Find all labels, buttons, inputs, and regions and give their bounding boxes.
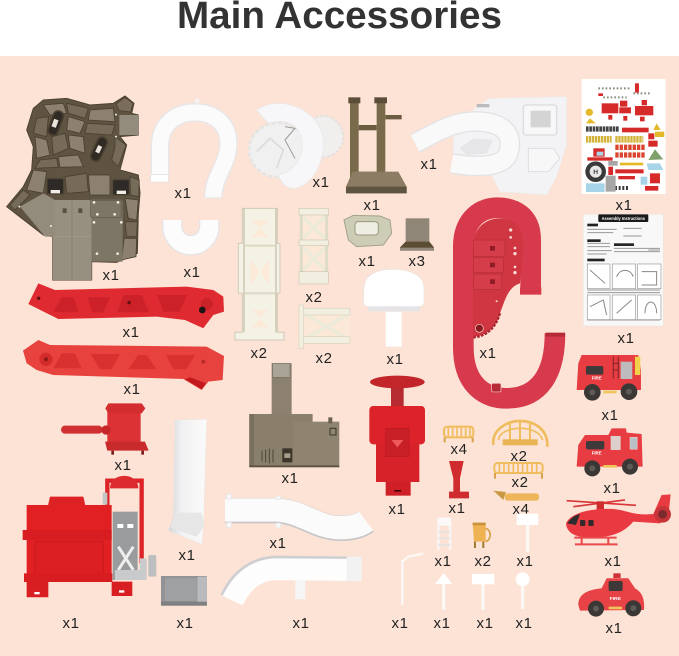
item: grey base block [400,218,434,270]
item: white curved track lower [232,557,362,632]
item: white radar dome: x1 [386,351,404,368]
item: rock base: x1 [102,267,120,284]
item: white lamp post: x1 [391,615,409,632]
item: horizontal lattice: x2 [315,350,333,367]
item: white curved track upper: x1 [269,535,287,552]
item: yellow bar: x4 [512,501,530,518]
sticker scene [587,83,660,191]
item: fire truck two [577,428,643,497]
item: yellow long barrier: x2 [511,474,529,491]
item: small rock: x1 [358,253,376,270]
item: brown machine block: x1 [281,470,299,487]
item: round sign: x1 [515,615,533,632]
item: white rectangular sign upper: x1 [516,553,534,570]
item: red bridge bar upper [28,283,224,341]
item: fire truck one: x1 [601,407,619,424]
item: fire truck two: FIRE [592,450,602,455]
item: large white swirl slide [415,97,567,195]
item: yellow barrier small: x4 [450,441,468,458]
item: red pole tower [369,376,425,518]
item: grey tray [161,576,207,632]
item: triangle sign: x1 [433,615,451,632]
item: red helicopter: x1 [604,553,622,570]
item: white radar dome [363,269,424,368]
item: fire truck two: x1 [603,480,621,497]
item: white lamp post [391,554,423,632]
item: small rock [344,215,392,270]
item: horizontal lattice [299,305,350,367]
item: short lattice tower: x2 [305,289,323,306]
item: red fire car [578,573,644,637]
item: triangle sign [433,573,452,632]
item: white swirl track: x1 [312,174,330,191]
item: red fire car: x1 [605,620,623,637]
item: brown machine block [249,363,339,487]
item: red crank machine [61,403,149,474]
item: tall lattice tower: x2 [250,345,268,362]
item: red fire car: FIRE [610,596,622,602]
item: small U track [172,220,209,281]
item: small red post [448,461,469,517]
item: brown stand [346,97,407,214]
item: white ladder [434,518,452,570]
item: white chute: x1 [178,547,196,564]
item: fire truck one: FIRE [592,375,602,380]
item: red fire station [23,476,156,632]
item: sticker sheet: x1 [615,197,633,214]
item: small U track: x1 [183,264,201,281]
item: brown stand: x1 [363,197,381,214]
item: yellow bar [493,491,539,518]
item: assembly instructions sheet [583,214,663,347]
item: white curved track lower: x1 [292,615,310,632]
item: rectangular sign [472,574,494,632]
item: white ladder: x1 [434,553,452,570]
item: assembly instructions sheet: x1 [617,330,635,347]
item: rock base [7,96,140,284]
item: short lattice tower [299,208,328,306]
item: red bridge bar lower: x1 [123,381,141,398]
item: round sign [515,572,533,632]
item: tall lattice tower [235,208,284,362]
item: red crank machine: x1 [114,457,132,474]
item: yellow long barrier [494,463,543,491]
item: white hook track: x1 [174,185,192,202]
item: large white swirl slide: x1 [420,156,438,173]
item: yellow mug piece [473,523,492,570]
item: big red hook ramp [463,208,565,398]
item: red fire station: x1 [62,615,80,632]
item: red pole tower: x1 [388,501,406,518]
item: grey tray: x1 [176,615,194,632]
item: yellow arch barrier: x2 [510,448,528,465]
item: red helicopter [566,494,671,570]
item: small red post: x1 [448,500,466,517]
item: grey base block: x3 [408,253,426,270]
item: sticker sheet: H [593,169,598,176]
item: white chute [168,419,207,564]
item: assembly instructions sheet: Assembly Instructions [602,216,645,222]
item: white hook track [151,98,228,202]
item: red bridge bar lower [23,340,224,398]
item: sticker sheet [582,79,666,214]
item: white rectangular sign upper [516,514,538,570]
item: white curved track upper [225,494,366,552]
item: big red hook ramp: x1 [479,345,497,362]
item: yellow barrier small [444,427,473,458]
item: fire truck one [577,355,641,424]
item: yellow mug piece: x2 [474,553,492,570]
item: red bridge bar upper: x1 [122,324,140,341]
item: rectangular sign: x1 [476,615,494,632]
item: white swirl track [249,103,343,191]
item: yellow arch barrier [493,421,547,465]
